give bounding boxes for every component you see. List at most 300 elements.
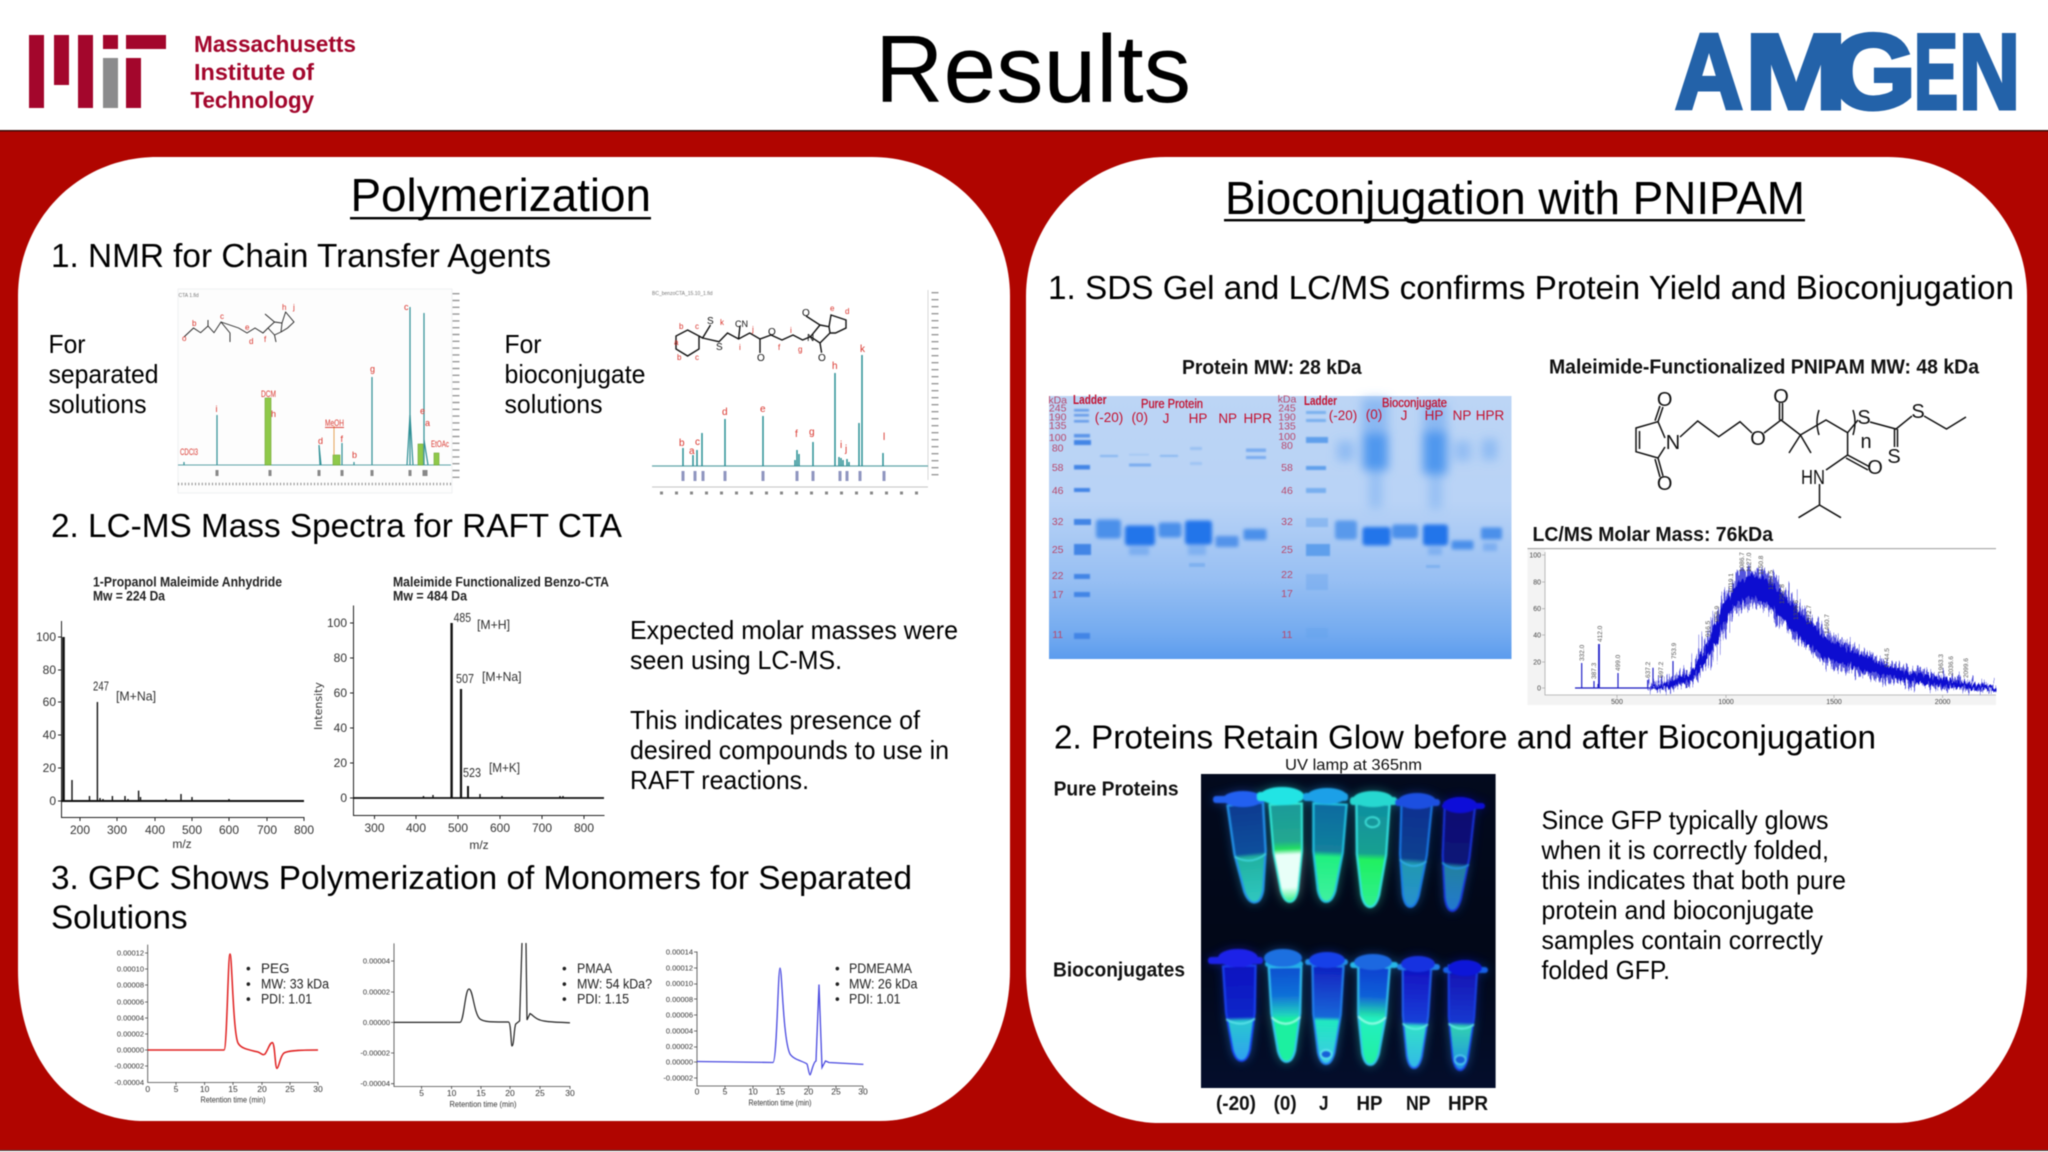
chart: GPC PMAA: PDI: 1.15 — [577, 992, 629, 1006]
text: for bioconjugate solutions: bioconjugate — [504, 359, 646, 389]
logo: Amgen: N — [1959, 12, 2020, 132]
chart: mass spectrum 2: 507 — [456, 671, 474, 686]
chart: NMR spectrum 1: d — [318, 436, 323, 446]
chart: GPC PDMEAMA: 20 — [804, 1087, 813, 1097]
tube labels: NP — [1406, 1093, 1430, 1115]
chart: LC/MS spectrum: 916.5 — [1705, 620, 1712, 637]
text: for separated solutions: solutions — [48, 389, 146, 419]
chart: NMR spectrum 2: h — [832, 361, 838, 372]
image: SDS gel: (-20) — [1329, 408, 1357, 423]
chemical structure: PNIPAM — [1636, 386, 1966, 518]
chart: NMR spectrum 2: S — [707, 316, 714, 327]
chart: GPC PDMEAMA: 5 — [723, 1087, 728, 1097]
chart: NMR spectrum 2: k — [860, 344, 866, 355]
chemical structure: PNIPAM: O — [1773, 386, 1789, 408]
chart: NMR spectrum 1: CDCl3 — [180, 447, 198, 457]
chart: mass spectrum 2: 40 — [334, 721, 347, 735]
gel labels: 245 — [1049, 402, 1067, 414]
chart: GPC PEG: -0.00004 — [114, 1078, 144, 1087]
chart: NMR spectrum 2: e — [830, 304, 835, 313]
chart: GPC PDMEAMA: • — [835, 977, 840, 992]
chart: GPC PMAA: PMAA — [577, 961, 612, 976]
tube labels: (-20) — [1216, 1093, 1256, 1115]
tube labels: (0) — [1274, 1093, 1297, 1115]
chart: LC/MS spectrum: 2036.6 — [1948, 656, 1955, 676]
chart: NMR spectrum 2: j — [751, 325, 754, 334]
chart: NMR spectrum 2: k — [720, 318, 725, 327]
chart: LC/MS spectrum: 1326.6 — [1793, 600, 1800, 620]
chart: NMR spectrum 1: h — [282, 303, 286, 312]
chart: LC/MS spectrum: 956.9 — [1714, 605, 1721, 622]
logo: MIT — [29, 31, 356, 113]
gel labels: 17 — [1281, 588, 1293, 600]
image: UV tubes photo — [1201, 774, 1496, 1088]
chart: mass spectrum 1: m/z — [172, 837, 192, 851]
chart: LC/MS spectrum: 1744.5 — [1884, 648, 1891, 668]
chart: GPC PMAA: MW: 54 kDa? — [577, 977, 652, 992]
chart: GPC PEG: 0.00002 — [117, 1030, 144, 1038]
chart: GPC PMAA: 25 — [535, 1088, 545, 1098]
glow halo — [1208, 787, 1488, 1070]
chart: GPC PMAA: 10 — [447, 1088, 457, 1098]
chart: LC/MS spectrum: 1150.8 — [1758, 555, 1765, 575]
chart: mass spectrum 1: 500 — [182, 823, 202, 837]
chart: NMR spectrum 1: MeOH — [325, 418, 344, 428]
chart: mass spectrum 1: 80 — [43, 663, 56, 677]
chart: NMR spectrum 1: c — [220, 312, 224, 321]
chart: mass spectrum 2: Intensity — [312, 682, 325, 730]
chart: NMR spectrum 2: c — [695, 353, 699, 362]
chart: LC/MS spectrum — [1528, 548, 1996, 706]
chart: GPC PEG: • — [246, 961, 251, 976]
text: GFP conclusion: folded GFP. — [1542, 955, 1670, 985]
chart: mass spectrum 1: 40 — [43, 728, 56, 742]
chart: mass spectrum 1: 400 — [145, 823, 165, 837]
chart: mass spectrum 2: 100 — [327, 616, 347, 630]
chart: GPC PEG: 25 — [285, 1084, 295, 1094]
faint bands — [1100, 447, 1440, 568]
chart: GPC PMAA: • — [562, 961, 567, 976]
chart: mass spectrum 2: 80 — [334, 651, 347, 665]
logo: Amgen: G — [1830, 12, 1916, 132]
chart: mass spectrum 2: m/z — [469, 838, 489, 852]
chart: NMR spectrum 2: b — [679, 438, 685, 449]
gel labels: kDa — [1048, 394, 1067, 406]
text: for bioconjugate solutions — [504, 329, 646, 419]
chart: LC/MS spectrum: 1127.0 — [1746, 552, 1753, 572]
chart: GPC PMAA: 0.00000 — [363, 1018, 390, 1027]
chart: mass spectrum 2: 523 — [463, 765, 481, 780]
chart: mass spectrum 1: 600 — [219, 823, 239, 837]
chart: NMR spectrum 2: l — [883, 432, 885, 443]
chart: NMR spectrum 2: c — [695, 322, 699, 331]
chart: NMR spectrum 1: b — [352, 450, 357, 460]
chart: mass spectrum 1: 800 — [294, 823, 314, 837]
chart: mass spectrum 1: [M+Na] — [116, 689, 156, 704]
chart: GPC PEG: 0.00010 — [117, 964, 144, 974]
gel labels: 46 — [1281, 485, 1293, 497]
gel labels: 11 — [1052, 629, 1063, 641]
image: SDS gel: (0) — [1366, 407, 1382, 422]
chart: NMR spectrum 1: CTA 1.fid — [178, 293, 199, 299]
text: GFP conclusion: Since GFP typically glows — [1542, 805, 1828, 835]
logo: Amgen: E — [1914, 12, 1958, 132]
chart: GPC PDMEAMA: • — [835, 992, 840, 1006]
chart: NMR spectrum 1: c — [404, 302, 409, 312]
gel labels: 100 — [1049, 432, 1067, 444]
chart: mass spectrum 2: Maleimide Functionalized Benzo-CTA — [393, 574, 609, 590]
chart: LC/MS spectrum: 637.2 — [1645, 661, 1652, 678]
chart: mass spectrum 1: 300 — [107, 823, 127, 837]
image: SDS gel — [1048, 392, 1512, 659]
chart: LC/MS spectrum: 1019.1 — [1728, 573, 1735, 593]
tube labels: HP — [1356, 1093, 1382, 1115]
title: Results — [875, 16, 1191, 123]
chart: GPC PMAA: 20 — [505, 1088, 515, 1098]
chart: NMR spectrum 1: h — [271, 409, 276, 419]
subheading: NMR: 1. NMR for Chain Transfer Agents — [51, 237, 551, 274]
chart: GPC PMAA: • — [562, 992, 567, 1006]
chart: NMR spectrum 1: j — [292, 303, 295, 312]
chart: mass spectrum 1: 200 — [70, 823, 90, 837]
chart: LC/MS spectrum: 2099.6 — [1963, 658, 1970, 678]
tube labels — [1216, 1093, 1489, 1115]
chart: mass spectrum 2: 500 — [448, 821, 468, 835]
image: SDS gel: HPR — [1243, 411, 1272, 426]
gel labels: 190 — [1049, 412, 1067, 424]
chart: LC/MS spectrum: 1963.3 — [1938, 654, 1945, 674]
chart: GPC PEG: 0.00006 — [117, 998, 144, 1006]
chart: mass spectrum 2: [M+Na] — [482, 669, 522, 684]
chart: NMR spectrum 1: a — [425, 418, 430, 428]
chart: GPC PMAA: 30 — [565, 1088, 575, 1098]
text: for bioconjugate solutions: For — [504, 329, 542, 359]
chemical structure: PNIPAM: N — [1666, 432, 1680, 454]
chart: NMR spectrum 2: d — [722, 407, 728, 418]
chart: GPC PEG: • — [246, 977, 251, 992]
top row tubes — [1213, 787, 1485, 912]
chart: GPC PEG: -0.00002 — [114, 1062, 144, 1070]
chart: mass spectrum 1: 700 — [257, 823, 277, 837]
chart: NMR spectrum 1 — [178, 289, 456, 493]
chart: NMR spectrum 2: BC_benzoCTA_15.10_1.fid — [652, 291, 713, 297]
chart: LC/MS spectrum: 697.2 — [1658, 661, 1665, 678]
chart: GPC PDMEAMA: 0.00012 — [666, 964, 693, 972]
smears — [1337, 398, 1497, 509]
gel labels: 25 — [1281, 544, 1293, 556]
chart: GPC PDMEAMA: 0.00010 — [666, 979, 693, 988]
text: LC-MS conclusions: desired compounds to use in — [630, 735, 949, 765]
chart: mass spectrum 2: 60 — [334, 686, 347, 700]
chart: NMR spectrum 2: CN — [735, 319, 748, 329]
chart: NMR spectrum 1: e — [245, 323, 250, 332]
chart: mass spectrum 2: 20 — [334, 756, 347, 770]
chemical structure: PNIPAM: n — [1860, 431, 1872, 453]
text: LC-MS conclusions: This indicates presence of — [630, 705, 921, 735]
chart: mass spectrum 2: 700 — [532, 821, 552, 835]
chart: NMR spectrum 2: O — [818, 353, 826, 364]
subheading: GPC: 3. GPC Shows Polymerization of Monomers for Separated — [51, 859, 912, 896]
chart: NMR spectrum 2: g — [809, 427, 815, 438]
ladder bands — [1074, 409, 1091, 639]
heading: polymerization: Polymerization — [350, 169, 651, 221]
logo: MIT: Massachusetts — [194, 31, 356, 57]
chart: LC/MS spectrum: 1252.8 — [1779, 584, 1786, 604]
chart: NMR spectrum 2: d — [845, 307, 849, 316]
chart: LC/MS spectrum: 1086.7 — [1739, 552, 1746, 572]
chart: GPC PDMEAMA: 10 — [748, 1087, 758, 1097]
chart: GPC PEG: 15 — [228, 1084, 238, 1094]
header band — [0, 0, 2048, 132]
chart: NMR spectrum 2: f — [795, 429, 798, 440]
chart: NMR spectrum 2: O — [757, 353, 765, 364]
chart: NMR spectrum 2: i — [790, 326, 792, 335]
chart: LC/MS spectrum: 80 — [1533, 580, 1541, 586]
chart: NMR spectrum 2: c — [695, 437, 700, 448]
label: protein MW: Protein MW: 28 kDa — [1182, 357, 1362, 379]
protein bands — [1096, 520, 1502, 555]
gel labels: 135 — [1278, 420, 1296, 432]
text: GFP conclusion: this indicates that both pure — [1542, 865, 1846, 895]
chart: NMR spectrum 2: f — [778, 343, 781, 352]
chart: LC/MS spectrum: 499.0 — [1615, 654, 1622, 671]
chart: GPC PEG: PDI: 1.01 — [261, 992, 312, 1006]
chart: mass spectrum 2: Mw = 484 Da — [393, 588, 467, 604]
image: SDS gel: Ladder — [1304, 393, 1337, 408]
logo: MIT: Institute of — [194, 59, 314, 85]
chart: GPC PEG: 0.00012 — [117, 948, 144, 958]
chart: LC/MS spectrum: 2000 — [1935, 699, 1950, 706]
chart: GPC PMAA: • — [562, 977, 567, 992]
chart: mass spectrum 1: 100 — [36, 630, 56, 644]
chart: GPC PEG: 0.00000 — [117, 1046, 144, 1054]
chart: GPC PDMEAMA: 0.00008 — [666, 995, 693, 1004]
chart: GPC PDMEAMA: 0.00004 — [666, 1026, 693, 1036]
chart: GPC PMAA: -0.00004 — [360, 1079, 390, 1088]
chart: NMR spectrum 1: i — [216, 404, 218, 414]
chart: mass spectrum 1: 20 — [43, 761, 56, 775]
gel labels — [1048, 394, 1296, 641]
panel: polymerization — [18, 157, 1010, 1121]
text: GFP conclusion — [1541, 805, 1846, 985]
chart: NMR spectrum 2: O — [768, 327, 776, 338]
chemical structure: PNIPAM: HN — [1801, 467, 1825, 489]
gel labels: 22 — [1052, 570, 1064, 582]
text: for separated solutions — [48, 329, 158, 419]
label: UV lamp: UV lamp at 365nm — [1285, 757, 1422, 774]
image: SDS gel: Bioconjugate — [1382, 395, 1447, 410]
chart: mass spectrum 1: 1-Propanol Maleimide Anhydride — [93, 574, 282, 590]
chart: LC/MS spectrum: 1000 — [1718, 699, 1734, 706]
chart: NMR spectrum 2: i — [840, 440, 842, 451]
chart: mass spectrum 2: 0 — [340, 791, 347, 805]
chart: GPC PDMEAMA: 30 — [858, 1087, 868, 1097]
chart: GPC PDMEAMA: 25 — [831, 1087, 841, 1097]
chart: mass spectrum 2: 485 — [454, 610, 471, 625]
subheading: glow: 2. Proteins Retain Glow before and after Bioconjugation — [1054, 718, 1876, 756]
chart: GPC PEG: MW: 33 kDa — [261, 977, 329, 992]
chart: NMR spectrum 2: i — [739, 343, 741, 352]
image: SDS gel: J — [1401, 408, 1407, 423]
subheading: LC-MS: 2. LC-MS Mass Spectra for RAFT CTA — [51, 507, 622, 544]
chart: GPC PDMEAMA: Retention time (min) — [748, 1098, 812, 1108]
gel labels: 80 — [1281, 440, 1293, 452]
chart: NMR spectrum 1: DCM — [261, 389, 276, 399]
subheading: SDS gel: 1. SDS Gel and LC/MS confirms Protein Yield and Bioconjugation — [1048, 269, 2014, 306]
chart: LC/MS spectrum: 1500 — [1826, 699, 1842, 706]
chart: GPC PEG: Retention time (min) — [200, 1095, 266, 1105]
gel labels: kDa — [1278, 394, 1296, 406]
chart: GPC PEG: 10 — [200, 1084, 210, 1094]
gel labels: 80 — [1052, 442, 1064, 454]
gel labels: 11 — [1282, 629, 1293, 641]
chemical structure: PNIPAM: O — [1657, 389, 1672, 411]
text: GFP conclusion: protein and bioconjugate — [1542, 895, 1814, 925]
chart: GPC PEG: 30 — [313, 1084, 323, 1094]
chart: GPC PEG: • — [246, 992, 251, 1006]
chart: LC/MS spectrum: 500 — [1611, 699, 1623, 706]
chart: NMR spectrum 2 — [652, 290, 935, 493]
text: LC-MS conclusions: RAFT reactions. — [630, 765, 809, 795]
chart: GPC PDMEAMA — [663, 948, 918, 1108]
chart: LC/MS spectrum: 1372.7 — [1806, 605, 1813, 625]
label: PNIPAM MW: Maleimide-Functionalized PNIPAM MW: 48 kDa — [1549, 356, 1980, 378]
chemical structure — [184, 312, 294, 342]
chart: NMR spectrum 1: e — [420, 406, 425, 416]
chemical structure: PNIPAM: S — [1887, 446, 1901, 468]
chart: GPC PDMEAMA: 0.00000 — [666, 1058, 693, 1066]
chart: NMR spectrum 2: a — [674, 338, 679, 347]
chart: LC/MS spectrum: 412.0 — [1597, 625, 1604, 642]
label: pure proteins: Pure Proteins — [1054, 779, 1179, 801]
chemical structure: PNIPAM: O — [1657, 473, 1672, 495]
gel labels: 32 — [1052, 516, 1064, 528]
chart: mass spectrum 2: 600 — [490, 821, 510, 835]
chart: mass spectrum 1: 60 — [43, 695, 56, 709]
chart: LC/MS spectrum: 40 — [1533, 632, 1541, 640]
image: SDS gel: J — [1163, 411, 1169, 426]
chart: NMR spectrum 2: N — [807, 333, 814, 344]
chart: GPC PDMEAMA: 0 — [695, 1087, 700, 1097]
chart: LC/MS spectrum: 100 — [1529, 552, 1541, 560]
chemical structure — [676, 315, 846, 356]
chart: GPC PMAA: -0.00002 — [360, 1048, 390, 1058]
chart: LC/MS spectrum: 387.3 — [1591, 662, 1598, 679]
chart: GPC PDMEAMA: 0.00002 — [666, 1042, 693, 1051]
chart: NMR spectrum 2: S — [716, 342, 723, 353]
chemical structure: PNIPAM: O — [1867, 457, 1883, 479]
text: GFP conclusion: samples contain correctly — [1542, 925, 1823, 955]
image: SDS gel: Ladder — [1073, 392, 1106, 407]
chart: mass spectrum 1: 247 — [93, 679, 109, 694]
panel: bioconjugation — [1026, 157, 2027, 1123]
gel labels: 58 — [1281, 462, 1293, 474]
text: for separated solutions: For — [48, 329, 86, 359]
chart: NMR spectrum 2: g — [798, 345, 802, 354]
image: SDS gel: NP — [1218, 411, 1237, 426]
chart: GPC PMAA — [360, 943, 652, 1109]
chart: mass spectrum 1: Mw = 224 Da — [93, 588, 165, 604]
chart: GPC PDMEAMA: PDI: 1.01 — [849, 992, 900, 1006]
chart: GPC PEG: 20 — [257, 1084, 267, 1094]
chart: LC/MS spectrum: 0 — [1537, 686, 1541, 692]
chart: GPC PDMEAMA: 0.00014 — [666, 948, 693, 956]
chart: NMR spectrum 1: EtOAc — [431, 439, 449, 449]
text: for separated solutions: separated — [48, 359, 158, 389]
gel labels: 135 — [1049, 420, 1067, 432]
chart: mass spectrum 2: [M+H] — [477, 617, 510, 632]
chart: NMR spectrum 2: a — [689, 446, 695, 457]
chart: GPC PEG: 0.00004 — [117, 1014, 144, 1022]
chemical structure: PNIPAM: S — [1911, 401, 1925, 423]
chart: NMR spectrum 1: d — [249, 337, 253, 346]
gel labels: 190 — [1278, 412, 1296, 424]
image: SDS gel: NP — [1453, 408, 1471, 423]
chart: LC/MS spectrum: 1204.5 — [1768, 570, 1775, 590]
bottom row tubes — [1208, 949, 1488, 1070]
text: for bioconjugate solutions: solutions — [504, 389, 602, 419]
chart: mass spectrum 2: 800 — [574, 821, 594, 835]
text: GFP conclusion: when it is correctly folded, — [1541, 835, 1829, 865]
label: bioconjugates: Bioconjugates — [1053, 960, 1185, 982]
chart: NMR spectrum 2: b — [679, 322, 684, 331]
gel labels: 245 — [1278, 402, 1296, 414]
chart: NMR spectrum 2: O — [802, 308, 810, 319]
chart: GPC PDMEAMA: -0.00002 — [663, 1074, 693, 1082]
image: SDS gel: (0) — [1131, 410, 1148, 425]
chart: NMR spectrum 1: f — [264, 335, 267, 344]
image: SDS gel: HPR — [1476, 408, 1504, 423]
chart: GPC PMAA: 0.00002 — [363, 988, 390, 996]
chart: NMR spectrum 1: o — [182, 334, 187, 343]
chart: mass spectrum 1: 0 — [49, 794, 56, 808]
subheading: GPC: Solutions — [51, 898, 188, 936]
chart: NMR spectrum 1: g — [370, 364, 375, 374]
text: LC-MS conclusions — [630, 615, 958, 795]
chart: GPC PEG: 0 — [145, 1084, 150, 1094]
logo: Amgen: A — [1675, 12, 1743, 132]
chart: NMR spectrum 2: b — [677, 353, 682, 362]
chart: GPC PDMEAMA: 15 — [776, 1087, 785, 1097]
text: LC-MS conclusions: seen using LC-MS. — [630, 645, 842, 675]
chart: GPC PMAA: 5 — [419, 1088, 424, 1098]
chart: GPC PEG: 0.00008 — [117, 980, 144, 990]
image: SDS gel: (-20) — [1095, 410, 1123, 425]
chart: NMR spectrum 1: f — [340, 434, 344, 444]
chart: GPC PEG — [114, 945, 329, 1105]
chart: GPC PDMEAMA: • — [835, 961, 840, 976]
subheading: GPC — [51, 859, 912, 936]
chart: GPC PDMEAMA: PDMEAMA — [849, 961, 912, 976]
tube labels: HPR — [1448, 1093, 1489, 1115]
chart: GPC PMAA: 15 — [476, 1088, 486, 1098]
gel labels: 32 — [1281, 516, 1293, 528]
chart: GPC PEG: PEG — [261, 961, 290, 976]
chart: LC/MS spectrum: 60 — [1533, 606, 1541, 613]
chart: LC/MS spectrum: 1460.7 — [1824, 614, 1831, 634]
chemical structure: PNIPAM: O — [1750, 428, 1766, 450]
chart: NMR spectrum 2: e — [760, 404, 766, 415]
chart: GPC PDMEAMA: MW: 26 kDa — [849, 977, 918, 992]
gel labels: 100 — [1278, 431, 1296, 443]
gel labels: 22 — [1281, 569, 1293, 581]
image: SDS gel: Pure Protein — [1141, 396, 1203, 411]
chemical structure: PNIPAM: S — [1857, 407, 1871, 429]
chart: mass spectrum 2 — [312, 574, 609, 852]
gel labels: 46 — [1052, 485, 1064, 497]
heading: bioconjugation: Bioconjugation with PNIPAM — [1225, 172, 1805, 224]
chart: NMR spectrum 2: j — [844, 444, 847, 455]
